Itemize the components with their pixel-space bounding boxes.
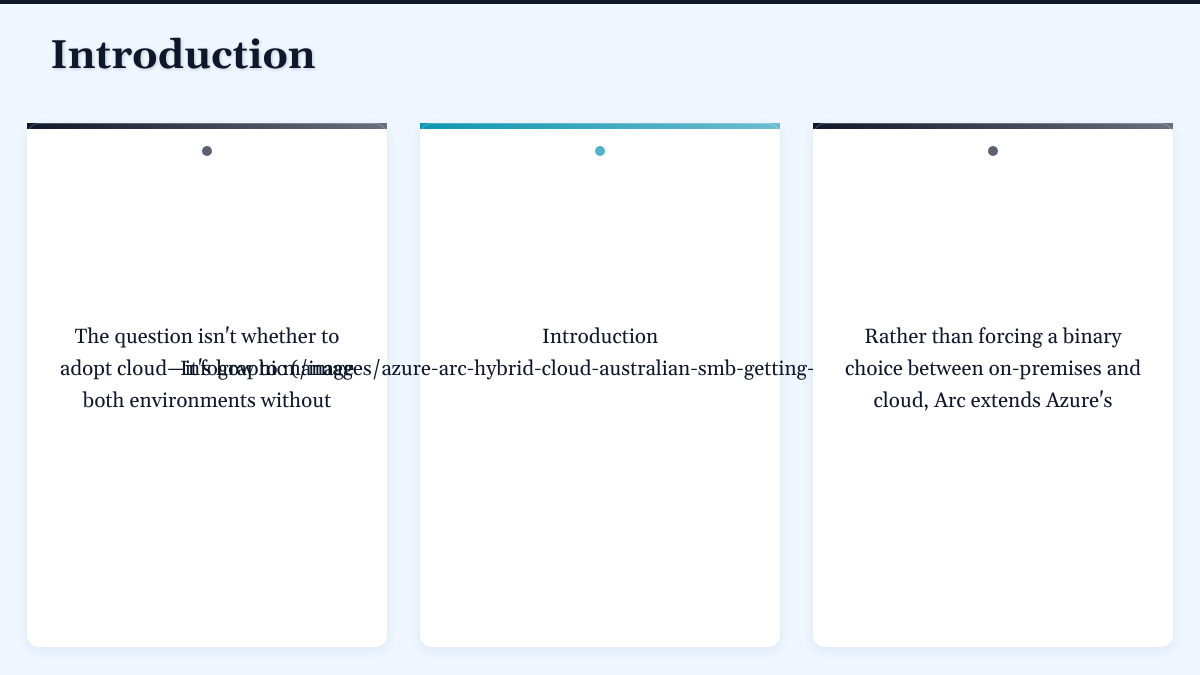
centre card top gradient bar: [420, 123, 780, 129]
centre card corner edge: [420, 123, 780, 647]
centre card overflowing path text: Infographic (/images/azure-arc-hybrid-cloud-australian-smb-getting-: [180, 357, 815, 383]
title: Introduction: [50, 31, 315, 82]
right card dot icon: [988, 146, 998, 156]
centre card text: Introduction: [542, 325, 658, 351]
left card text: both environments without: [83, 389, 331, 415]
right card text: choice between on-premises and: [845, 357, 1140, 383]
left card corner edge: [27, 123, 387, 647]
right card corner edge: [812, 123, 1172, 647]
right card top gradient bar: [812, 123, 1172, 129]
right card text: cloud, Arc extends Azure's: [873, 389, 1112, 415]
left card text: The question isn't whether to: [75, 325, 339, 351]
panel: right card: [812, 123, 1172, 647]
right card text: Rather than forcing a binary: [864, 325, 1121, 351]
left card text: adopt cloud—it's how to manage: [60, 357, 354, 383]
right card text: [845, 325, 1141, 415]
left card dot icon: [202, 146, 212, 156]
panel: centre card: [420, 123, 780, 647]
left card text: [60, 325, 354, 415]
left card top gradient bar: [27, 123, 387, 129]
centre card dot icon: [595, 146, 605, 156]
top accent bar: [0, 0, 1200, 4]
panel: left card: [27, 123, 387, 647]
